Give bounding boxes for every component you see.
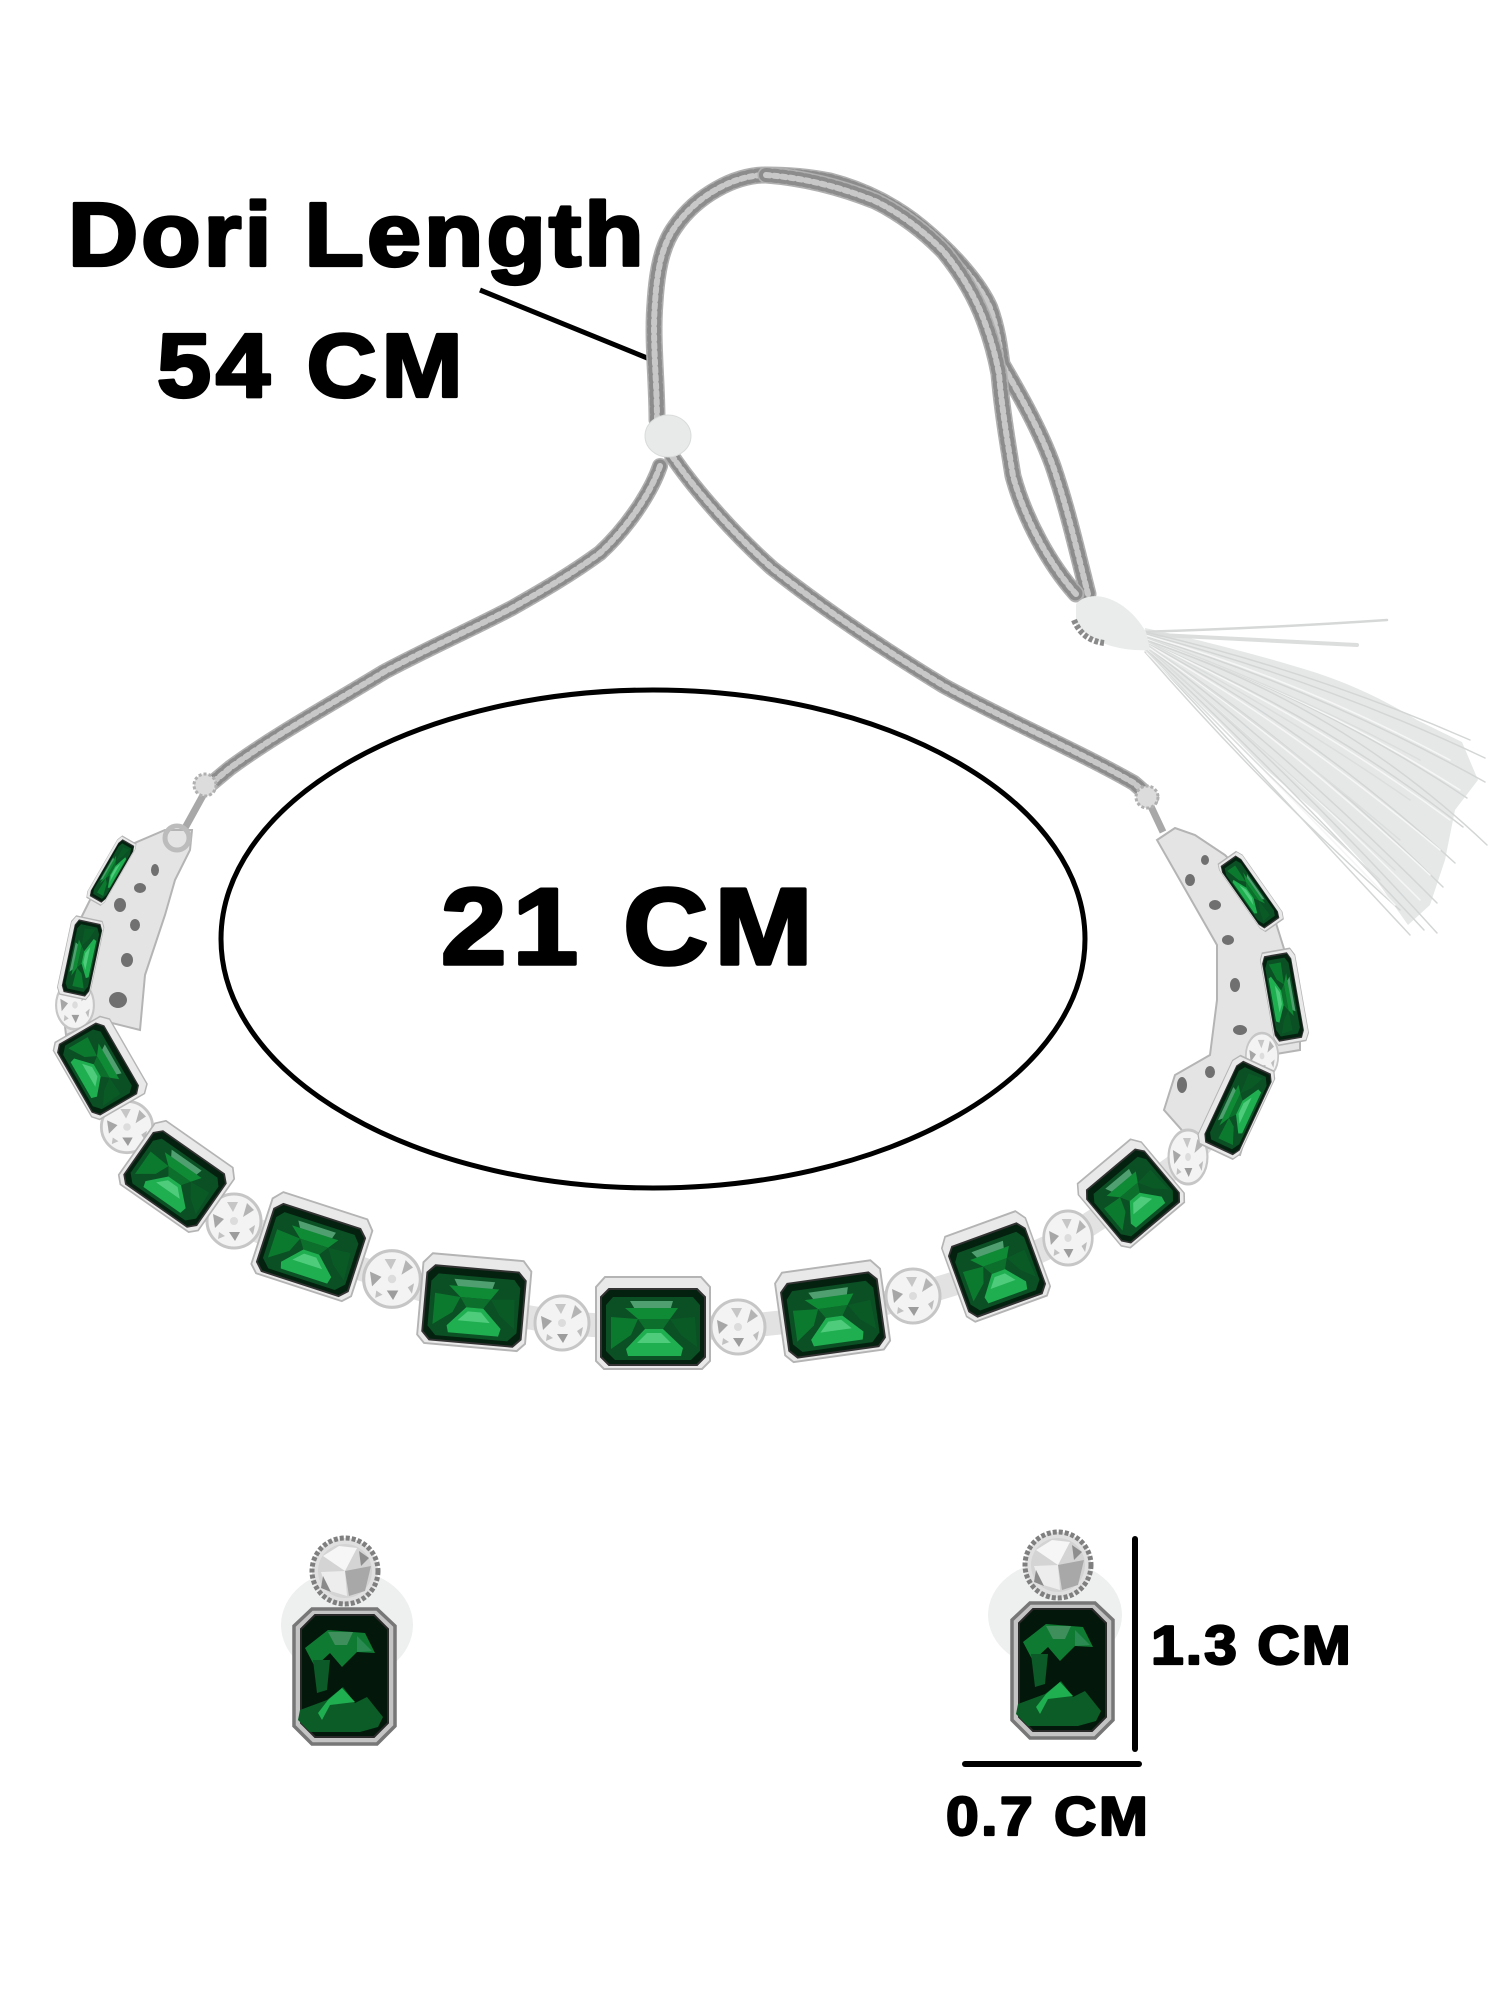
label: 0.7 cm: 0.7 CM bbox=[946, 1787, 1148, 1847]
earring back disc bbox=[988, 1561, 1122, 1669]
left clasp block bbox=[62, 774, 216, 1035]
leader line from label to cord bbox=[480, 290, 657, 362]
stud stone bbox=[312, 1538, 378, 1604]
label: dori length bbox=[68, 184, 644, 416]
slider bead bbox=[645, 415, 691, 457]
stud stone bbox=[1025, 1532, 1091, 1598]
crystal round stones bbox=[56, 981, 1278, 1354]
emerald drop bbox=[1012, 1603, 1113, 1738]
green emerald stones bbox=[50, 835, 1310, 1369]
height dimension line bbox=[1132, 1539, 1138, 1749]
left earring bbox=[281, 1538, 413, 1744]
tassel bbox=[1074, 596, 1487, 935]
emerald drop bbox=[294, 1609, 395, 1744]
label: 21 cm: 21 CM bbox=[441, 866, 813, 988]
right earring bbox=[988, 1532, 1122, 1738]
width dimension line bbox=[965, 1761, 1139, 1767]
cord: adjustable dori bbox=[206, 175, 1151, 798]
label: 1.3 cm: 1.3 CM bbox=[1151, 1616, 1351, 1676]
label: dori length: Dori Length bbox=[68, 184, 644, 285]
right clasp block bbox=[1136, 786, 1300, 1155]
label: dori length: 54 CM bbox=[157, 315, 463, 416]
necklace bbox=[50, 774, 1310, 1369]
earring back disc bbox=[281, 1570, 413, 1680]
metal band bbox=[98, 1056, 1262, 1329]
measurement ellipse bbox=[221, 690, 1085, 1188]
